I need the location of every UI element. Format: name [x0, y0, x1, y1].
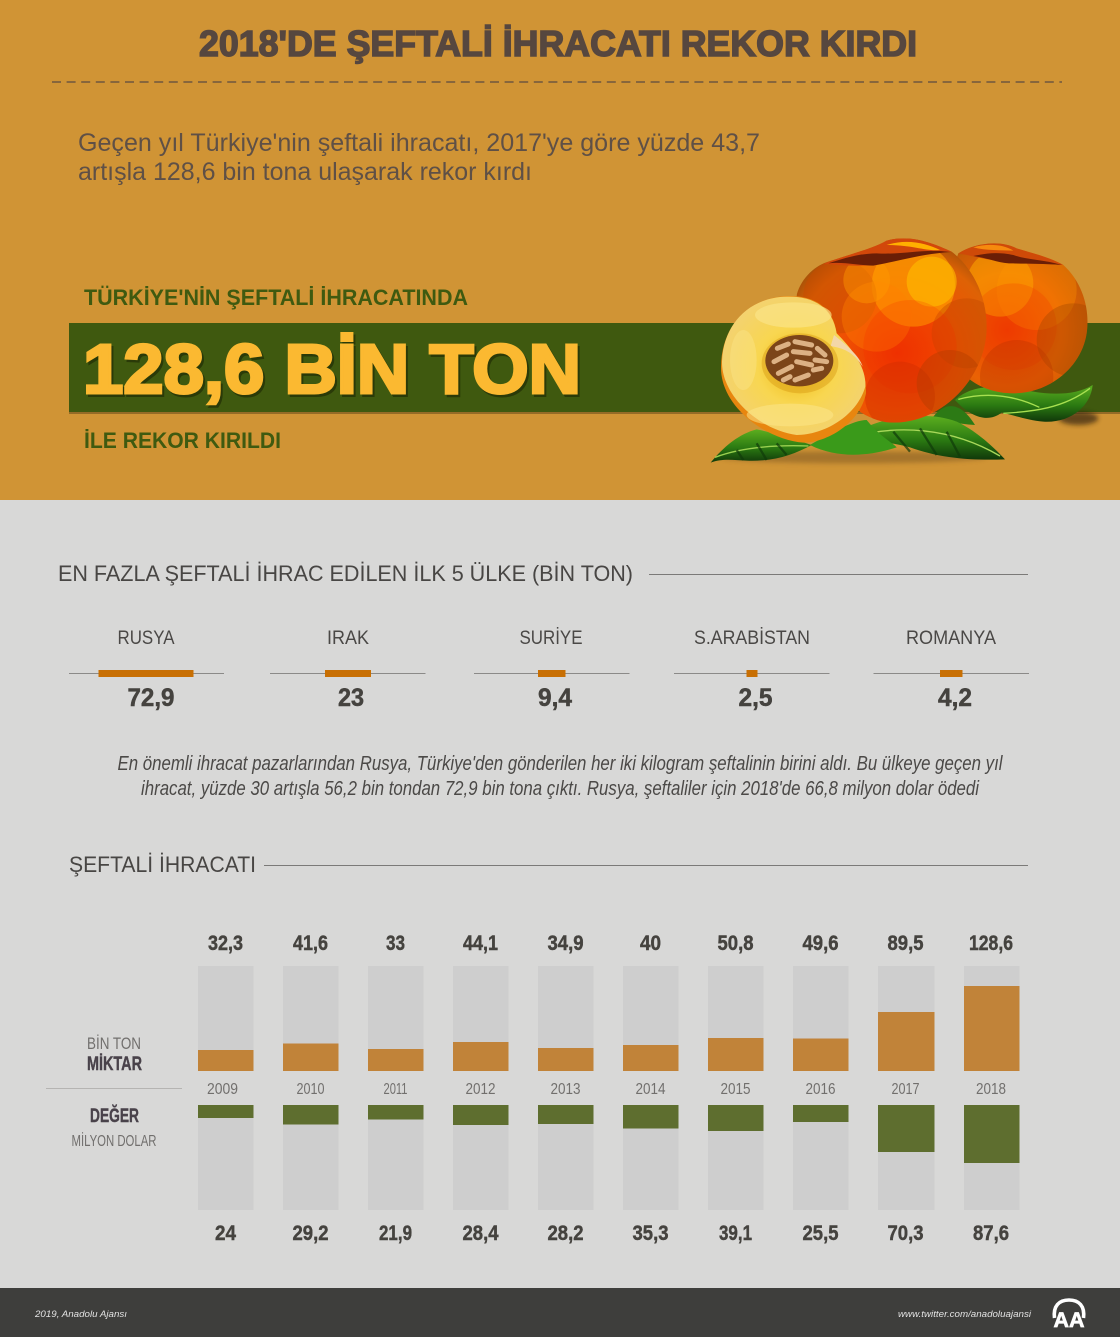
footer — [0, 1288, 1120, 1337]
column 2011 — [368, 932, 424, 1245]
column 2016: 2016 — [806, 1081, 836, 1098]
legend: quantity and value labels: BİN TON — [87, 1034, 141, 1053]
legend: quantity and value labels: DEĞER — [90, 1105, 139, 1127]
column 2009: 32,3 — [208, 932, 243, 955]
callout: big number: 128,6 BİN TON — [85, 332, 583, 410]
callout: green band — [69, 323, 1120, 414]
chart: country IRAK: IRAK — [327, 628, 369, 649]
column 2010: 41,6 — [293, 932, 328, 955]
column 2012: 28,4 — [462, 1222, 499, 1245]
chart: country SURİYE: SURİYE — [520, 628, 582, 649]
chart: country S.ARABİSTAN — [674, 628, 830, 712]
column 2018: 2018 — [976, 1081, 1006, 1098]
icon: AA logo: AA — [1054, 1309, 1084, 1332]
column 2017: 89,5 — [888, 932, 924, 955]
column 2012: 2012 — [466, 1081, 496, 1098]
panel: lower background — [0, 500, 1120, 1288]
footer: twitter address: www.twitter.com/anadoluajansi — [898, 1309, 1032, 1320]
panel: header background — [0, 0, 1120, 500]
chart: country ROMANYA: 4,2 — [938, 684, 972, 712]
column 2016: 49,6 — [802, 932, 838, 955]
column 2009: 2009 — [207, 1081, 238, 1098]
title: 2018'DE ŞEFTALİ İHRACATI REKOR KIRDI — [199, 23, 917, 64]
column 2016 — [793, 932, 848, 1245]
column 2010: 2010 — [296, 1081, 325, 1098]
column 2011: 2011 — [384, 1081, 408, 1098]
legend: quantity and value labels — [46, 1034, 182, 1150]
halved peach — [721, 296, 866, 443]
chart: yearly quantity and value bars — [198, 932, 1020, 1245]
column 2012 — [453, 932, 508, 1245]
legend: quantity and value labels: MİKTAR — [87, 1054, 142, 1075]
footer: credit: 2019, Anadolu Ajansı — [34, 1309, 127, 1320]
column 2013 — [538, 932, 594, 1245]
column 2010: 29,2 — [292, 1222, 328, 1245]
chart: country ROMANYA: ROMANYA — [906, 628, 996, 649]
heading: peach exports: ŞEFTALİ İHRACATI — [69, 852, 256, 877]
heading: top 5 countries: EN FAZLA ŞEFTALİ İHRAC EDİLEN İLK 5 ÜLKE (BİN TON) — [58, 561, 633, 586]
column 2018: 128,6 — [969, 932, 1013, 955]
legend: quantity and value labels: MİLYON DOLAR — [72, 1132, 156, 1150]
column 2017: 70,3 — [888, 1222, 924, 1245]
chart: country RUSYA — [69, 628, 224, 712]
chart: country S.ARABİSTAN: 2,5 — [738, 684, 773, 712]
chart: country SURİYE: 9,4 — [538, 684, 572, 712]
column 2013: 2013 — [550, 1081, 580, 1098]
callout: record footer: İLE REKOR KIRILDI — [84, 428, 281, 453]
column 2014 — [623, 932, 678, 1245]
chart: country IRAK: 23 — [338, 684, 364, 712]
chart: country ROMANYA — [874, 628, 1029, 712]
column 2014: 35,3 — [632, 1222, 668, 1245]
peach stone — [765, 335, 833, 386]
column 2009 — [198, 932, 254, 1245]
column 2018 — [964, 932, 1020, 1245]
intro text — [78, 129, 760, 186]
intro text: Geçen yıl Türkiye'nin şeftali ihracatı, 2017'ye göre yüzde 43,7 — [78, 129, 760, 157]
column 2014: 2014 — [636, 1081, 666, 1098]
main peach — [796, 238, 986, 423]
text block: Russia note: ihracat, yüzde 30 artışla 56,2 bin tondan 72,9 bin tona çıktı. Rusya, şeftaliler için 2018'de 66,8 milyon dolar ödedi — [141, 778, 979, 800]
column 2013: 28,2 — [548, 1222, 584, 1245]
column 2015 — [708, 932, 764, 1245]
column 2015: 50,8 — [718, 932, 754, 955]
column 2012: 44,1 — [463, 932, 498, 955]
callout: record heading: TÜRKİYE'NİN ŞEFTALİ İHRACATINDA — [84, 285, 468, 310]
leaves — [711, 385, 1093, 463]
text block: Russia note — [118, 753, 1003, 800]
intro text: artışla 128,6 bin tona ulaşarak rekor kırdı — [78, 158, 532, 186]
column 2016: 25,5 — [802, 1222, 839, 1245]
column 2017: 2017 — [892, 1081, 920, 1098]
chart: country SURİYE — [474, 628, 630, 712]
chart: country RUSYA: 72,9 — [128, 684, 174, 712]
icon: peaches illustration — [711, 233, 1110, 463]
column 2017 — [878, 932, 934, 1245]
column 2018: 87,6 — [973, 1222, 1009, 1245]
column 2014: 40 — [640, 932, 661, 955]
chart: country RUSYA: RUSYA — [118, 628, 175, 649]
chart: country IRAK — [270, 628, 426, 712]
chart: country S.ARABİSTAN: S.ARABİSTAN — [694, 628, 810, 649]
column 2015: 39,1 — [719, 1222, 752, 1245]
column 2009: 24 — [215, 1222, 236, 1245]
column 2011: 21,9 — [379, 1222, 412, 1245]
column 2011: 33 — [386, 932, 405, 955]
column 2010 — [283, 932, 338, 1245]
column 2013: 34,9 — [548, 932, 584, 955]
callout: big number: 128,6 BİN TON — [83, 330, 581, 408]
column 2015: 2015 — [720, 1081, 750, 1098]
rear peach — [957, 243, 1088, 394]
